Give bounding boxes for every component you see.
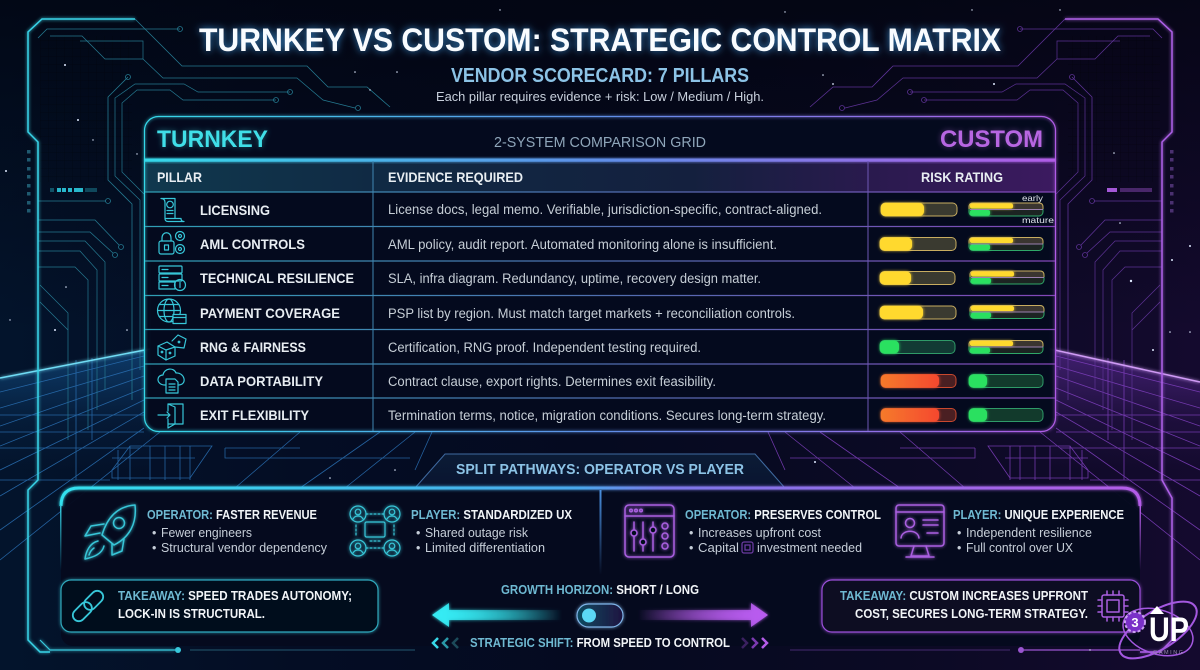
row: technical resilience: TECHNICAL RESILIENCE	[200, 270, 354, 286]
risk bars: custom	[969, 203, 1044, 422]
block: player standardized ux	[411, 507, 572, 555]
table border	[144, 116, 1056, 432]
block: operator preserves control: OPERATOR: PRESERVES CONTROL	[685, 507, 881, 522]
bottom connector left	[40, 640, 415, 653]
icon: lock and gears	[159, 232, 184, 254]
row: rng and fairness: Certification, RNG proof. Independent testing required.	[388, 340, 701, 355]
bar: payment custom	[970, 306, 1044, 318]
side dots right	[1170, 150, 1174, 212]
logo: 3UP Gaming	[1111, 591, 1200, 669]
logo: 3UP Gaming: 3	[1131, 615, 1139, 630]
column dividers	[373, 161, 868, 431]
icon: dice	[158, 335, 186, 360]
logo: 3UP Gaming: GAMING	[1153, 650, 1183, 656]
column header: risk: RISK RATING	[921, 169, 1003, 185]
arrow: right to control	[638, 603, 768, 627]
block: player standardized ux: •	[416, 541, 420, 555]
icon: cloud and document	[158, 369, 184, 393]
bar: aml custom	[969, 238, 1043, 250]
circuit traces right	[810, 19, 1162, 440]
icon: monitor with profile	[896, 505, 944, 557]
callout: takeaway custom: COST, SECURES LONG-TERM STRATEGY.	[855, 606, 1088, 621]
horizon line right	[1050, 349, 1200, 382]
block: operator faster revenue: Fewer engineers	[161, 526, 252, 540]
led bar right	[1107, 188, 1152, 192]
callout: takeaway custom: TAKEAWAY: CUSTOM INCREASES UPFRONT	[840, 588, 1088, 603]
bar: rng turnkey	[880, 340, 955, 354]
outer frame left	[28, 19, 135, 652]
block: player unique experience: •	[957, 526, 961, 540]
block: operator faster revenue: •	[152, 526, 156, 540]
column header: evidence: EVIDENCE REQUIRED	[388, 169, 523, 185]
bar: data turnkey	[881, 374, 956, 388]
title: TURNKEY VS CUSTOM: STRATEGIC CONTROL MATRIX	[199, 22, 1002, 58]
block: player standardized ux: •	[416, 526, 420, 540]
icon: globe and card	[158, 299, 186, 324]
centre divider	[600, 490, 602, 575]
row: payment coverage	[158, 299, 795, 324]
floor grid right	[768, 356, 1200, 560]
floor grid left	[0, 356, 432, 560]
side dots left	[27, 150, 30, 212]
bar: licensing turnkey	[881, 203, 957, 216]
bottom connector right	[790, 647, 1140, 653]
row: payment coverage: PAYMENT COVERAGE	[200, 305, 340, 321]
block: operator faster revenue: Structural vendor dependency	[161, 541, 328, 555]
callout: takeaway turnkey: LOCK-IN IS STRUCTURAL.	[118, 606, 265, 621]
row: licensing: License docs, legal memo. Verifiable, jurisdiction-specific, contract-aligned.	[388, 202, 822, 217]
tab: split pathways: SPLIT PATHWAYS: OPERATOR VS PLAYER	[456, 461, 744, 478]
block: player standardized ux: Limited differentiation	[425, 541, 545, 555]
icon: server	[159, 266, 186, 290]
block: operator faster revenue	[147, 507, 328, 555]
bar: exit custom	[969, 408, 1043, 422]
icon: exit door	[158, 404, 183, 428]
row: technical resilience: SLA, infra diagram. Redundancy, uptime, recovery design matter.	[388, 271, 761, 286]
block: player unique experience: PLAYER: UNIQUE EXPERIENCE	[953, 507, 1124, 522]
block: operator preserves control	[685, 507, 881, 555]
icon: small chip	[742, 542, 753, 553]
chevrons right	[742, 638, 767, 648]
bar: exit turnkey	[881, 408, 956, 422]
horizon glow right	[1050, 350, 1200, 470]
block: player unique experience: Full control over UX	[966, 541, 1074, 555]
row: exit flexibility	[158, 404, 826, 428]
horizon glow left	[0, 350, 150, 470]
callout: takeaway turnkey	[61, 580, 378, 632]
row: payment coverage: PSP list by region. Must match target markets + reconciliation controls.	[388, 306, 795, 321]
icon: shared network	[350, 506, 400, 556]
panel: comparison table	[144, 116, 1056, 432]
panel top edge	[61, 488, 1140, 506]
icon: control sliders	[625, 505, 674, 557]
icon: processor chip	[1098, 591, 1128, 621]
heading: turnkey: TURNKEY	[157, 126, 268, 153]
row: aml controls	[159, 232, 777, 254]
row: aml controls: AML CONTROLS	[200, 236, 305, 252]
icon: chain link	[70, 588, 106, 624]
block: player unique experience	[953, 507, 1124, 555]
row: exit flexibility: Termination terms, notice, migration conditions. Secures long-term strategy.	[388, 408, 826, 423]
block: player unique experience: Independent resilience	[966, 526, 1092, 540]
row: aml controls: AML policy, audit report. Automated monitoring alone is insufficient.	[388, 237, 777, 252]
bar: payment turnkey	[880, 306, 956, 319]
row: data portability	[158, 369, 716, 393]
row: licensing: LICENSING	[200, 202, 270, 218]
panel: split pathways	[60, 454, 1141, 650]
outer frame right	[1065, 19, 1172, 652]
intro text: Each pillar requires evidence + risk: Low / Medium / High.	[436, 89, 764, 104]
bar: data custom	[969, 374, 1043, 388]
icon: licence scroll	[161, 198, 184, 222]
panel right edge	[1140, 505, 1141, 570]
label: early: early	[1022, 193, 1044, 203]
row: rng and fairness	[158, 335, 701, 360]
bar: aml turnkey	[880, 238, 956, 250]
block: player unique experience: •	[957, 541, 961, 555]
callout: takeaway turnkey: TAKEAWAY: SPEED TRADES AUTONOMY;	[118, 588, 352, 603]
column header band	[145, 160, 1055, 192]
header divider	[145, 158, 1055, 162]
risk bars: turnkey	[880, 203, 957, 422]
logo: 3UP Gaming: UP	[1149, 611, 1189, 649]
panel left edge	[60, 505, 62, 570]
block: player standardized ux: Shared outage risk	[425, 526, 529, 540]
toggle switch	[577, 604, 623, 627]
label: growth horizon: GROWTH HORIZON: SHORT / LONG	[501, 582, 699, 597]
callout: takeaway custom	[822, 580, 1140, 632]
row lines	[145, 192, 1055, 398]
heading: custom: CUSTOM	[940, 126, 1043, 153]
row: data portability: Contract clause, export rights. Determines exit feasibility.	[388, 374, 716, 389]
horizon line left	[0, 349, 150, 378]
bar: resilience turnkey	[880, 272, 955, 284]
row: technical resilience	[159, 266, 761, 290]
row: licensing	[161, 198, 822, 222]
led bar left	[50, 188, 97, 192]
left circuit grid	[40, 36, 132, 182]
label: mature: mature	[1022, 215, 1054, 225]
bar: rng custom	[969, 340, 1043, 354]
row: data portability: DATA PORTABILITY	[200, 373, 324, 389]
icon: rocket	[85, 505, 135, 559]
block: player standardized ux: PLAYER: STANDARDIZED UX	[411, 507, 572, 522]
row: rng and fairness: RNG & FAIRNESS	[200, 339, 306, 355]
heading: grid caption: 2-SYSTEM COMPARISON GRID	[494, 134, 706, 151]
arrow: left to speed	[432, 603, 562, 627]
block: operator preserves control: Capital	[698, 541, 739, 555]
circuit traces left	[38, 19, 390, 440]
block: operator preserves control: •	[689, 541, 693, 555]
right circuit grid	[1068, 36, 1160, 182]
row: exit flexibility: EXIT FLEXIBILITY	[200, 407, 310, 423]
block: operator preserves control: Increases upfront cost	[698, 526, 822, 540]
block: operator preserves control: •	[689, 526, 693, 540]
chevrons left	[433, 638, 458, 648]
column header: pillar: PILLAR	[157, 169, 202, 185]
bar: resilience custom	[970, 271, 1044, 284]
block: operator faster revenue: •	[152, 541, 156, 555]
label: strategic shift: STRATEGIC SHIFT: FROM SPEED TO CONTROL	[470, 635, 730, 650]
subtitle: VENDOR SCORECARD: 7 PILLARS	[451, 65, 749, 87]
block: operator faster revenue: OPERATOR: FASTER REVENUE	[147, 507, 317, 522]
block: operator preserves control: investment needed	[757, 541, 862, 555]
bar: licensing custom, early and mature	[969, 203, 1043, 216]
tab: split pathways	[415, 454, 785, 488]
